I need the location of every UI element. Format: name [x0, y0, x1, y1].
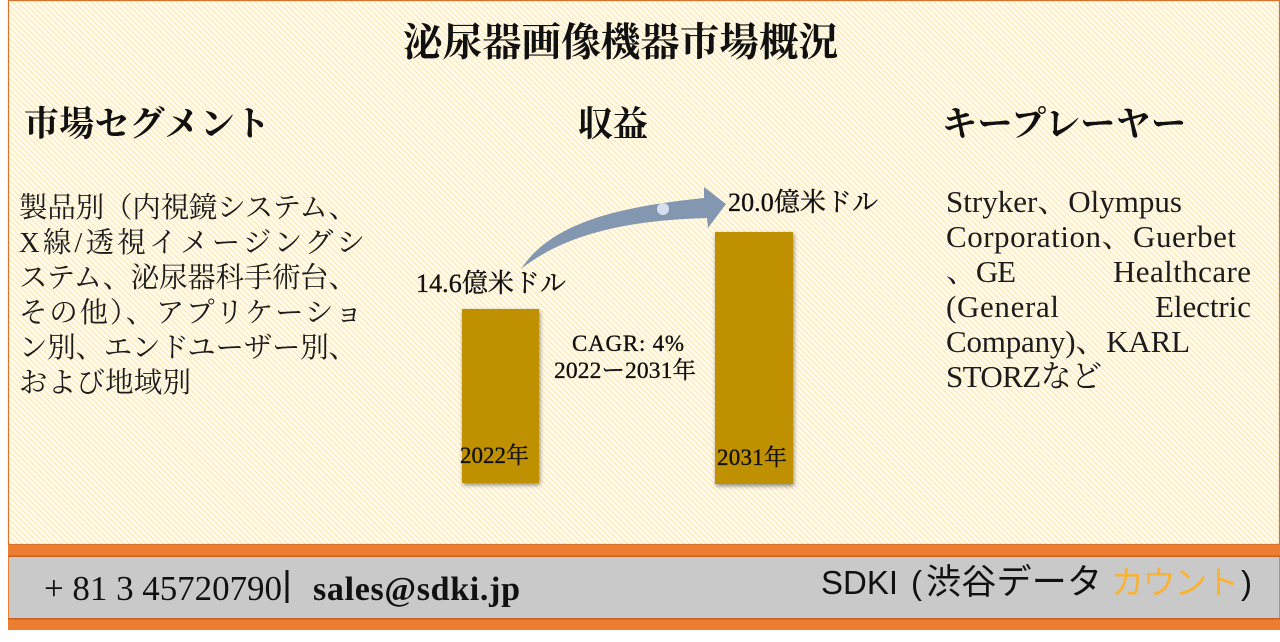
- text block: key players: 、GE: [946, 254, 1016, 289]
- footer: contact: [44, 569, 520, 608]
- text block: key players: Healthcare: [1113, 254, 1251, 289]
- text block: market segments: X線/透視イメージングシ: [19, 227, 365, 259]
- footer: brand: [821, 563, 1252, 602]
- heading: key players: キープレーヤー: [942, 105, 1186, 144]
- text block: key players: Stryker、Olympus: [946, 184, 1182, 219]
- text block: key players: Electric: [1155, 289, 1251, 324]
- footer: brand: (: [911, 564, 922, 601]
- callout: CAGR: CAGR: 4%: [572, 331, 684, 356]
- bar chart: revenue: [460, 232, 793, 484]
- footer: brand: SDKI: [821, 564, 898, 601]
- footer: brand: カウント: [1111, 564, 1239, 601]
- text block: market segments: [19, 192, 365, 399]
- bar: 2022: [460, 309, 539, 483]
- callout: CAGR: 2022ー2031年: [554, 357, 696, 384]
- text block: market segments: その他）、アプリケーショ: [19, 297, 363, 329]
- text block: key players: (General: [946, 289, 1059, 324]
- text block: key players: STORZなど: [946, 359, 1102, 394]
- arrow: growth: [521, 187, 726, 269]
- heading: market segments: 市場セグメント: [24, 105, 270, 144]
- text block: market segments: ステム、泌尿器科手術台、: [19, 262, 357, 294]
- label: 2031 value: 20.0億米ドル: [728, 188, 878, 217]
- bar: 2031: 2031年: [717, 445, 787, 470]
- text block: market segments: ン別、エンドユーザー別、: [19, 332, 357, 364]
- heading: revenue: 収益: [578, 105, 648, 144]
- label: 2022 value: 14.6億米ドル: [416, 269, 566, 298]
- text block: key players: Company)、KARL: [946, 324, 1190, 359]
- text block: key players: [946, 184, 1251, 394]
- callout: CAGR: [554, 331, 696, 384]
- title: 泌尿器画像機器市場概況: [403, 21, 838, 65]
- bar: 2031: [715, 232, 793, 484]
- text block: market segments: 製品別（内視鏡システム、: [19, 192, 357, 224]
- footer band: [8, 545, 1280, 630]
- footer: contact: + 81 3 45720790: [44, 569, 282, 608]
- footer: brand: 渋谷データ: [926, 563, 1102, 602]
- text block: market segments: および地域別: [19, 367, 191, 399]
- footer: brand: ): [1241, 564, 1252, 601]
- bar: 2022: 2022年: [460, 443, 529, 468]
- text block: key players: Corporation、Guerbet: [946, 219, 1236, 254]
- footer: contact: sales@sdki.jp: [313, 571, 520, 608]
